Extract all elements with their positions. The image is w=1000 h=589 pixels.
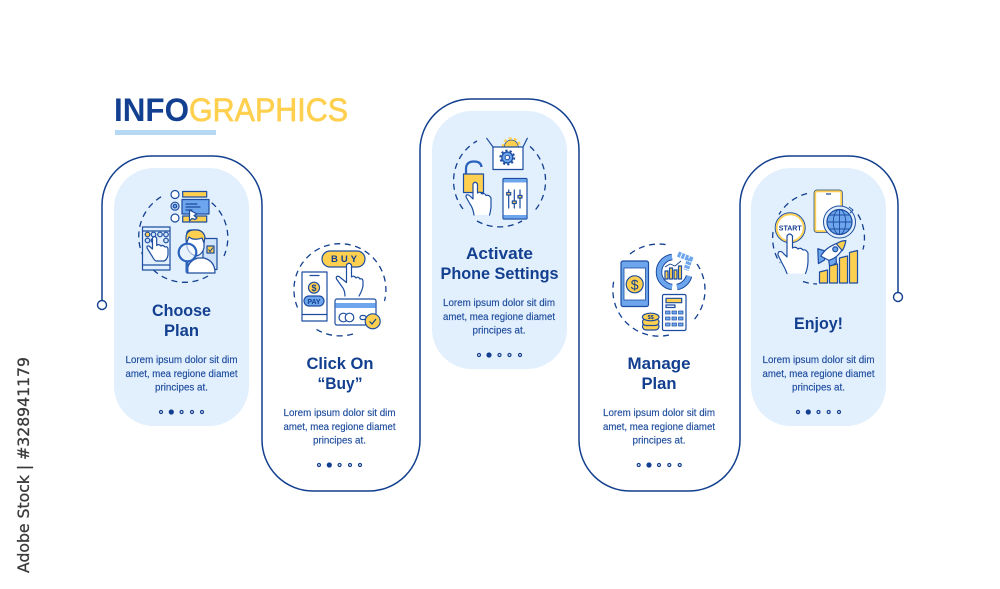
icon: buy: $ [311, 283, 317, 293]
heading: Phone Settings [440, 264, 558, 283]
icon: buy [294, 244, 386, 336]
text block: principes at. [155, 382, 208, 394]
text block: Lorem ipsum dolor sit dim [126, 354, 238, 366]
icon: buy: BUY [331, 254, 358, 265]
text block: amet, mea regione diamet [126, 368, 238, 380]
text block [603, 407, 715, 446]
text block: amet, mea regione diamet [603, 421, 715, 433]
text block: principes at. [792, 382, 845, 394]
heading: Enjoy! [794, 314, 843, 333]
icon: manage: $ [631, 276, 639, 292]
pagination dots [478, 353, 522, 357]
pagination dots [160, 410, 204, 414]
icon: enjoy [773, 190, 864, 284]
icon: enjoy: START [779, 225, 802, 232]
text block: amet, mea regione diamet [284, 421, 396, 433]
icon: settings [454, 138, 546, 227]
heading: Click On [306, 354, 374, 373]
icon: buy: PAY [307, 299, 321, 306]
title: INFO [114, 92, 189, 128]
text block: amet, mea regione diamet [443, 311, 555, 323]
heading: Activate [466, 244, 533, 263]
text block [284, 407, 396, 446]
panel: activate phone settings [432, 111, 567, 369]
text block [762, 354, 875, 394]
text block: principes at. [313, 434, 366, 446]
text block: principes at. [472, 324, 526, 336]
heading: Plan [642, 374, 676, 393]
heading: Plan [164, 321, 199, 340]
panel: manage plan [603, 244, 715, 467]
heading [440, 244, 558, 283]
text block: Lorem ipsum dolor sit dim [603, 407, 715, 419]
title: GRAPHICS [189, 92, 348, 128]
text block: principes at. [632, 434, 686, 446]
heading [306, 354, 374, 393]
panel: choose plan [114, 168, 249, 426]
heading [628, 354, 690, 393]
panel: click on buy [284, 244, 396, 467]
heading: Manage [628, 354, 690, 373]
heading [152, 301, 211, 340]
icon: manage [613, 244, 705, 336]
text block: amet, mea regione diamet [762, 368, 875, 380]
pagination dots [318, 463, 362, 467]
text block [126, 354, 238, 394]
pagination dots [637, 463, 681, 467]
text block [443, 297, 555, 336]
text block: Lorem ipsum dolor sit dim [762, 354, 875, 366]
text block: Lorem ipsum dolor sit dim [284, 407, 396, 419]
stock credit: Adobe Stock | #328941179 [14, 357, 33, 573]
panel: enjoy [751, 168, 886, 426]
icon: choose plan [139, 190, 228, 282]
pagination dots [796, 410, 840, 414]
heading: “Buy” [318, 374, 362, 393]
icon: manage: $$ [648, 315, 654, 321]
connector outline [98, 99, 902, 491]
text block: Lorem ipsum dolor sit dim [443, 297, 555, 309]
heading: Choose [152, 301, 211, 320]
title [114, 92, 348, 135]
